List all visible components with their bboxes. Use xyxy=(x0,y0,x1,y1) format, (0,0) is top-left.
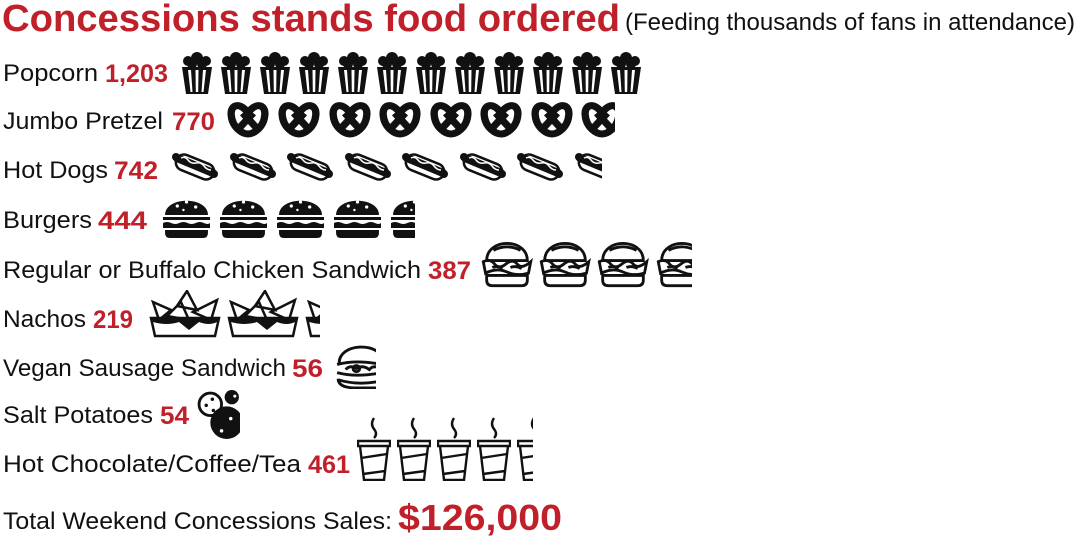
row: popcorn: Popcorn xyxy=(3,60,98,87)
row: burgers: 444 xyxy=(98,207,147,235)
icons: cups xyxy=(358,418,550,480)
icons: burger xyxy=(163,200,438,238)
row: hot drinks xyxy=(3,418,550,480)
row: hot dogs xyxy=(5,153,602,183)
row: burgers xyxy=(3,200,438,238)
row: nachos: 219 xyxy=(93,306,133,334)
row: nachos: Nachos xyxy=(3,306,86,333)
subtitle: (Feeding thousands of fans in attendance) xyxy=(625,9,1075,36)
icons: hot dog xyxy=(172,153,602,181)
row: hot drinks: Hot Chocolate/Coffee/Tea xyxy=(3,451,302,478)
row: vegan sausage: 56 xyxy=(292,355,323,383)
row: burgers: Burgers xyxy=(3,207,92,234)
row: hot drinks: 461 xyxy=(308,451,350,479)
row: pretzel: Jumbo Pretzel xyxy=(3,108,163,135)
row: nachos xyxy=(5,290,320,338)
icon: vegan sandwich xyxy=(337,347,382,388)
row: chicken sandwich xyxy=(3,243,706,286)
title xyxy=(2,0,1075,40)
row: hot dogs: Hot Dogs xyxy=(3,157,108,184)
total: $126,000 xyxy=(398,497,562,538)
row: salt potatoes: 54 xyxy=(160,402,189,430)
icons: nachos xyxy=(150,290,320,338)
row: vegan sausage: Vegan Sausage Sandwich xyxy=(3,355,286,382)
row: hot dogs: 742 xyxy=(114,157,158,185)
icons: chicken sandwich xyxy=(483,243,706,286)
row: salt potatoes xyxy=(3,390,243,439)
row: chicken sandwich: 387 xyxy=(428,257,471,285)
row: vegan sausage xyxy=(3,347,382,388)
icons: popcorn xyxy=(182,52,641,94)
row: pretzel: 770 xyxy=(172,108,215,136)
icon: salt potatoes xyxy=(199,390,243,439)
total: Total Weekend Concessions Sales: xyxy=(3,508,392,535)
total xyxy=(3,497,562,538)
row: popcorn xyxy=(3,52,641,94)
row: popcorn: 1,203 xyxy=(105,60,168,88)
row: salt potatoes: Salt Potatoes xyxy=(3,402,153,429)
row: pretzel xyxy=(3,106,619,136)
icons: pretzel xyxy=(231,106,619,134)
row: chicken sandwich: Regular or Buffalo Chicken Sandwich xyxy=(3,257,421,284)
